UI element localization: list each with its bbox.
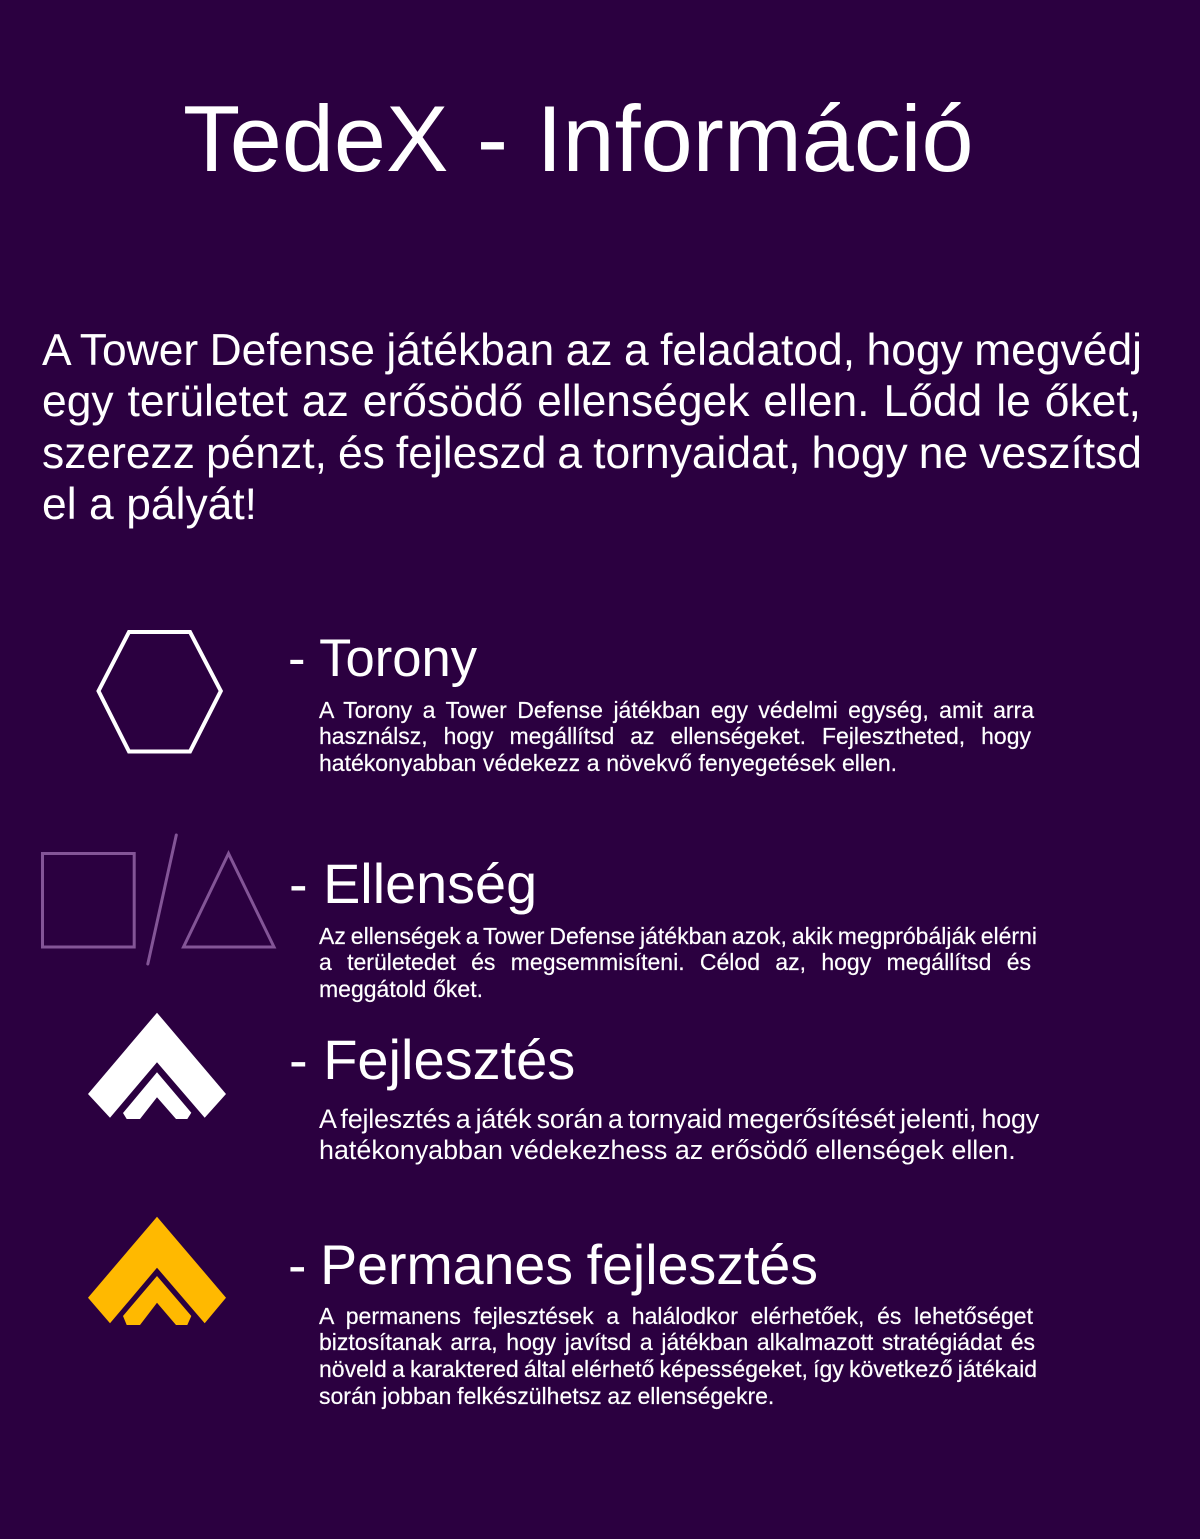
description: Ellenség	[318, 923, 1037, 1002]
description: Torony: használsz, hogy megállítsd az ellenségeket. Fejlesztheted, hogy	[319, 723, 1031, 749]
heading: Fejlesztés: - Fejlesztés	[289, 1028, 575, 1091]
description: Permanes fejlesztés: biztosítanak arra, hogy javítsd a játékban alkalmazott stratégiádat és	[319, 1329, 1035, 1355]
heading: Ellenség: - Ellenség	[289, 852, 537, 914]
description: Torony	[318, 697, 1034, 776]
description: Fejlesztés	[319, 1104, 1040, 1165]
intro text block: szerezz pénzt, és fejleszd a tornyaidat, hogy ne veszítsd	[42, 429, 1142, 478]
panel: Torony	[96, 629, 1034, 776]
description: Ellenség: Az ellenségek a Tower Defense játékban azok, akik megpróbálják elérni	[319, 923, 1037, 949]
title: TedeX - Információ	[183, 86, 974, 191]
description: Ellenség: a területedet és megsemmisíteni. Célod az, hogy megállítsd és	[319, 949, 1031, 975]
description: Fejlesztés: A fejlesztés a játék során a tornyaid megerősítését jelenti, hogy	[319, 1104, 1039, 1134]
panel: Ellenség	[41, 834, 1037, 1002]
panel: Permanes fejlesztés	[88, 1216, 1037, 1410]
description: Torony: hatékonyabban védekezz a növekvő fenyegetések ellen.	[319, 750, 897, 776]
intro text block: A Tower Defense játékban az a feladatod, hogy megvédj	[42, 326, 1142, 375]
icon: triangle enemy	[184, 854, 274, 947]
intro text block: el a pályát!	[42, 480, 257, 529]
description: Ellenség: meggátold őket.	[319, 976, 483, 1002]
intro text block: egy területet az erősödő ellenségek ellen. Lődd le őket,	[42, 377, 1141, 426]
description: Permanes fejlesztés: A permanens fejlesztések a halálodkor elérhetőek, és lehetőséget	[319, 1303, 1033, 1329]
description: Permanes fejlesztés	[318, 1303, 1037, 1410]
icon: line enemy	[148, 835, 176, 964]
icon: purple enemy shapes	[41, 834, 276, 966]
description: Fejlesztés: hatékonyabban védekezhess az erősödő ellenségek ellen.	[319, 1135, 1016, 1165]
heading: Torony: - Torony	[288, 629, 477, 688]
icon: white hexagon	[96, 630, 223, 754]
heading: Permanes fejlesztés: - Permanes fejlesztés	[288, 1234, 818, 1296]
icon: square enemy	[42, 854, 134, 947]
description: Torony: A Torony a Tower Defense játékban egy védelmi egység, amit arra	[319, 697, 1034, 723]
icon: gold upgrade chevrons	[88, 1216, 226, 1325]
intro text block	[42, 326, 1142, 529]
icon: white upgrade chevrons	[88, 1012, 226, 1119]
description: Permanes fejlesztés: növeld a karaktered által elérhető képességeket, így következő játékaid	[319, 1356, 1037, 1382]
panel: Fejlesztés	[88, 1012, 1040, 1165]
description: Permanes fejlesztés: során jobban felkészülhetsz az ellenségekre.	[319, 1383, 774, 1409]
